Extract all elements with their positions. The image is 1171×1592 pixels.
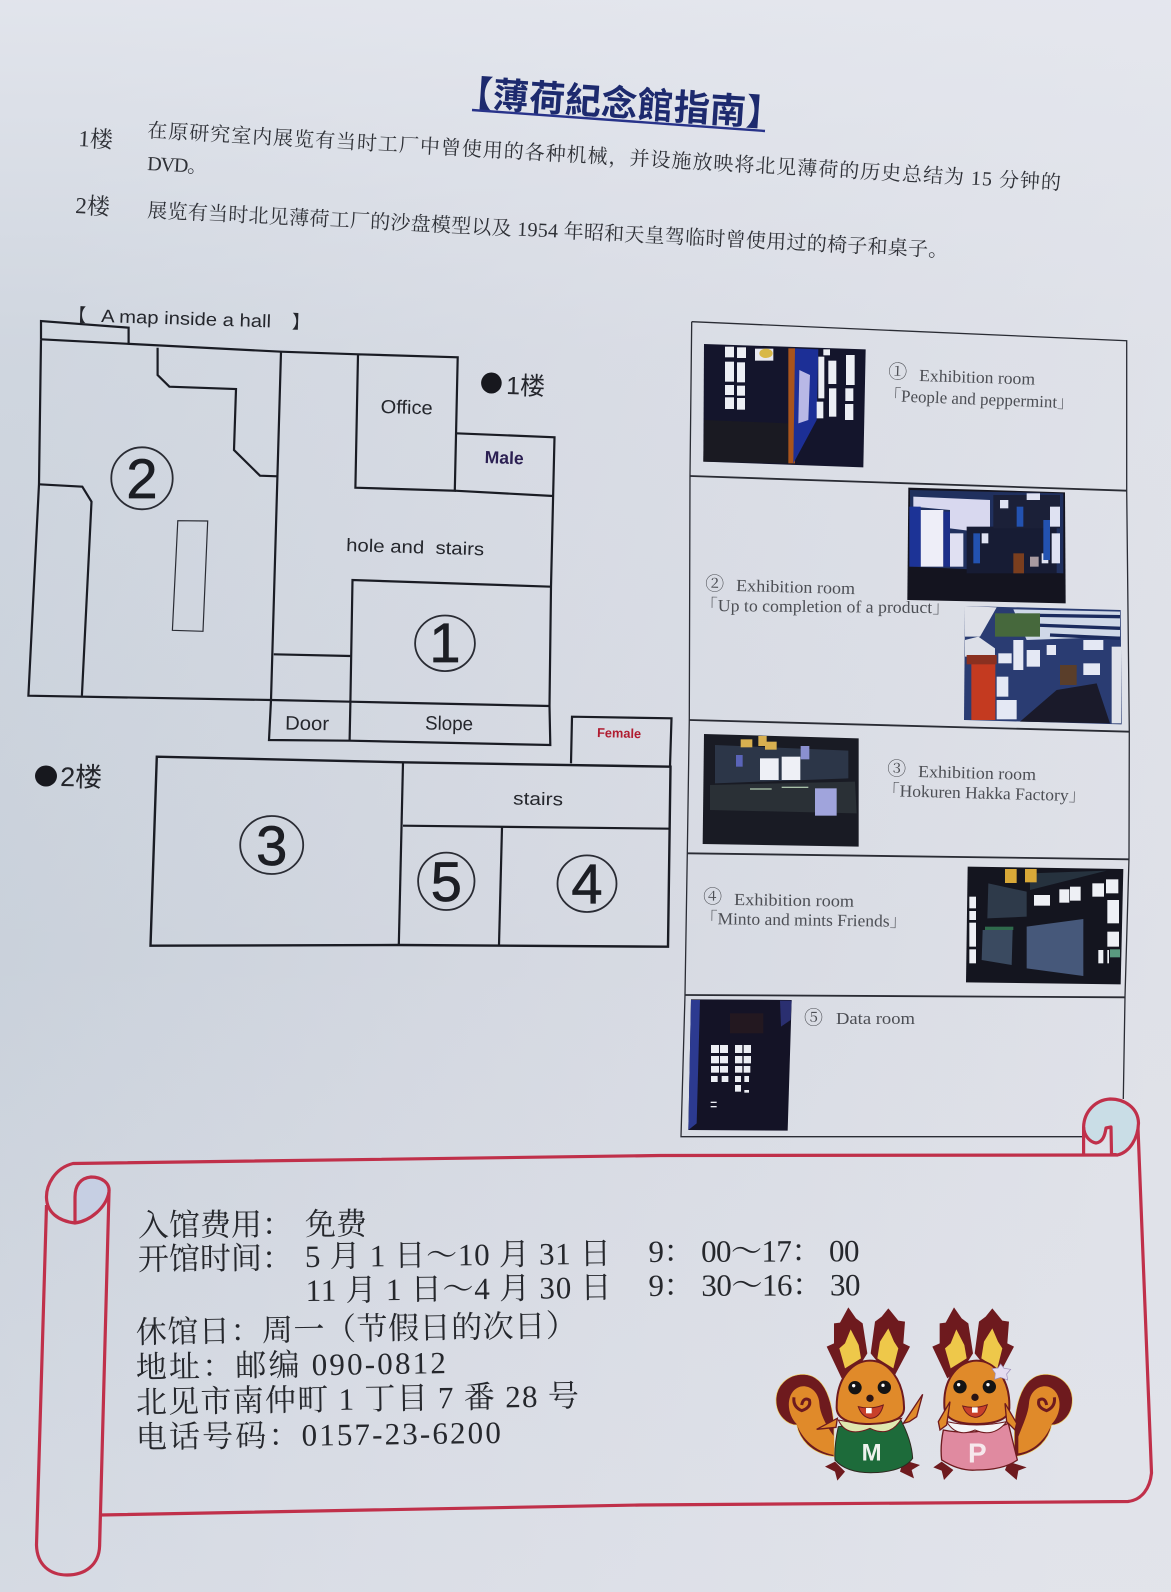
label: room 3: Exhibition room	[918, 762, 1036, 784]
address: 北见市南仲町 1 丁目 7 番 28 号	[136, 1378, 579, 1420]
room: female toilet	[571, 717, 672, 767]
room label: male: Male	[484, 447, 524, 468]
room label: office: Office	[380, 397, 433, 419]
text block: first floor description: 在原研究室内展览有当时工厂中曾使用的各种机械，并设施放映将北见薄荷的历史总结为 15 分钟的	[147, 119, 1062, 195]
telephone number: 电话号码：0157-23-6200	[136, 1415, 501, 1455]
room label: door: Door	[285, 713, 330, 735]
room marker 1: 1	[429, 611, 461, 674]
photo: room 3	[703, 734, 859, 847]
room marker 3	[240, 814, 303, 877]
panel: visitor information scroll	[36, 1099, 1152, 1575]
closing day: 休馆日：周一（节假日的次日）	[136, 1308, 577, 1350]
room marker 2: 2	[126, 447, 158, 510]
opening hours: 9： 00～17： 00	[648, 1233, 860, 1269]
title: 【薄荷紀念館指南】	[455, 72, 783, 135]
map heading: 【	[68, 305, 86, 326]
opening hours: 5 月 1 日～10 月 31 日	[305, 1236, 611, 1274]
floor plan: first floor	[28, 321, 554, 745]
text block: first floor description: 1楼	[78, 126, 114, 153]
label: room 5	[804, 1007, 915, 1029]
label: room 4: 「Minto and mints Friends」	[700, 909, 907, 931]
opening hours: 开馆时间：	[138, 1240, 293, 1277]
floor plan walls: second floor	[150, 757, 670, 947]
label: room 4: Exhibition room	[734, 890, 854, 911]
opening hours	[138, 1233, 861, 1308]
label: room 1: 「People and peppermint」	[884, 386, 1074, 412]
mascots	[776, 1307, 1072, 1481]
label: room 2: Exhibition room	[736, 576, 855, 598]
mascot P	[932, 1307, 1072, 1480]
floor label: 1st floor: 1楼	[506, 372, 545, 401]
label: room 5: ⑤	[804, 1007, 823, 1029]
opening hours: 9： 30～16： 30	[648, 1267, 861, 1303]
label: room 4: ④	[703, 886, 722, 908]
label: room 2: 「Up to completion of a product」	[700, 596, 950, 617]
label: room 3: ③	[887, 758, 906, 780]
photo: room 4	[966, 867, 1123, 984]
room marker 5	[418, 850, 474, 913]
label: room 4	[700, 886, 907, 931]
address	[136, 1345, 579, 1420]
panel frame	[681, 322, 1129, 1137]
room label: stairs: stairs	[513, 789, 563, 809]
text block: first floor description: DVD。	[147, 153, 208, 178]
mascot P: P	[968, 1438, 987, 1469]
panel: exhibition rooms list	[681, 322, 1129, 1137]
floor label: 2nd floor	[35, 762, 102, 793]
admission fee: 入馆费用：	[138, 1207, 293, 1243]
room marker 2	[111, 447, 173, 510]
room marker 5: 5	[431, 850, 462, 913]
floor label: 1st floor	[481, 372, 545, 401]
label: room 5: Data room	[836, 1009, 915, 1028]
scroll frame	[36, 1099, 1152, 1575]
map heading	[68, 305, 310, 333]
label: room 2: ②	[705, 573, 724, 595]
label: room 2	[700, 573, 950, 617]
label: room 3: 「Hokuren Hakka Factory」	[882, 781, 1086, 805]
mascot M: M	[862, 1440, 882, 1467]
text block: second floor description: 2楼	[75, 193, 111, 220]
room label: slope: Slope	[425, 713, 473, 735]
mascot M	[776, 1307, 923, 1481]
room marker 1	[415, 611, 475, 674]
map heading: A map inside a hall	[101, 306, 271, 331]
label: room 1: Exhibition room	[919, 366, 1035, 389]
address: 地址：邮编 090-0812	[136, 1345, 446, 1385]
opening hours: 11 月 1 日～4 月 30 日	[305, 1270, 612, 1308]
photo: room 5	[688, 999, 792, 1131]
label: room 1	[884, 361, 1074, 412]
room marker 4	[558, 852, 616, 915]
floor plan walls: first floor	[28, 321, 554, 745]
photo: room 2 lower	[964, 606, 1122, 724]
floor plan: second floor	[150, 717, 672, 947]
admission fee: 免费	[305, 1206, 368, 1242]
text block: second floor description: 展览有当时北见薄荷工厂的沙盘模型以及 1954 年昭和天皇驾临时曾使用过的椅子和桌子。	[147, 199, 949, 262]
label: room 1: ①	[888, 361, 908, 384]
room marker 4: 4	[571, 852, 603, 915]
room label: hall and stairs: hole and stairs	[346, 535, 484, 559]
room marker 3: 3	[256, 814, 287, 877]
map heading: 】	[292, 312, 310, 333]
floor label: 2nd floor: 2楼	[60, 762, 102, 793]
photo: room 2 upper	[907, 488, 1066, 603]
photo: room 1	[703, 344, 866, 467]
room: female toilet: Female	[597, 725, 641, 741]
label: room 3	[882, 758, 1086, 805]
